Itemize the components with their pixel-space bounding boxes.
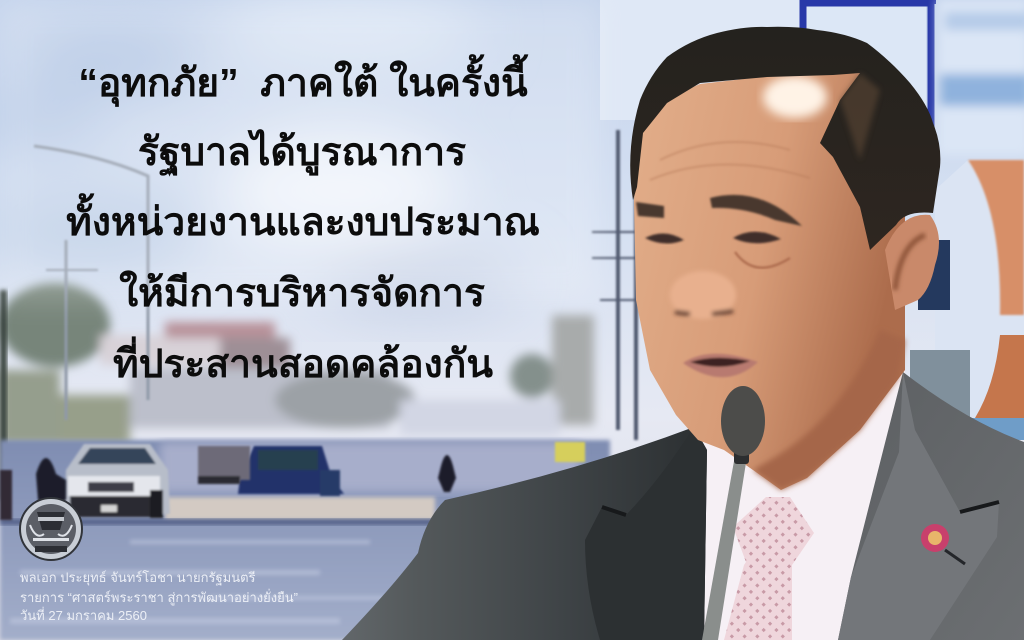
- portrait: face and neck: [634, 73, 905, 490]
- heading: quote text: รัฐบาลได้บูรณาการ: [138, 129, 466, 177]
- portrait: white shirt: [695, 370, 905, 640]
- portrait: jaw shadow: [753, 330, 905, 490]
- background: motorcyclist and pedestrian: [0, 442, 585, 520]
- background: orange building: [910, 160, 1024, 440]
- caption: speaker and programme credit: วันที่ 27 มกราคม 2560: [20, 607, 147, 623]
- portrait: forehead wrinkles: [650, 142, 810, 180]
- portrait: forehead highlight: [763, 76, 827, 118]
- background: distant grey car: [198, 446, 250, 484]
- heading: quote text: ทั้งหน่วยงานและงบประมาณ: [66, 193, 540, 244]
- background: sky patch right: [938, 0, 1024, 155]
- portrait: nose: [670, 271, 736, 319]
- caption: speaker and programme credit: [20, 570, 298, 623]
- veil: white haze over left: [0, 0, 600, 300]
- portrait: hair: [630, 27, 940, 250]
- portrait: suit right side: [838, 372, 1024, 640]
- portrait: ear: [885, 215, 939, 310]
- heading: quote text: ที่ประสานสอดคล้องกัน: [113, 336, 493, 386]
- caption: speaker and programme credit: รายการ “ศาสตร์พระราชา สู่การพัฒนาอย่างยั่งยืน”: [20, 589, 298, 606]
- background: dark left edge: [0, 290, 7, 500]
- portrait: speaker: [342, 27, 1024, 640]
- portrait: mouth: [683, 354, 758, 377]
- portrait: eyes: [645, 232, 781, 244]
- background: pickup truck: [64, 444, 170, 518]
- background: blue car: [238, 446, 344, 496]
- background: pale band behind head: [600, 0, 810, 120]
- portrait: lapel right: [838, 372, 999, 640]
- logo: government seal: [20, 498, 82, 560]
- background: flooded road: [0, 440, 610, 640]
- background: street lamps and poles: [34, 146, 148, 420]
- portrait: eyebrows: [636, 195, 802, 226]
- heading: quote text: “อุทกภัย” ภาคใต้ ในครั้งนี้: [78, 54, 529, 107]
- portrait: temple hair shading: [840, 73, 880, 160]
- caption: speaker and programme credit: พลเอก ประยุทธ์ จันทร์โอชา นายกรัฐมนตรี: [20, 570, 256, 586]
- heading: quote text: ให้มีการบริหารจัดการ: [119, 270, 485, 315]
- portrait: microphone: [702, 386, 765, 640]
- background: blue tower frame: [800, 0, 936, 130]
- portrait: dark lapel left: [585, 427, 707, 640]
- background: utility poles right: [592, 130, 640, 440]
- portrait: lapel notches: [602, 502, 999, 515]
- portrait: eye bags: [735, 252, 790, 268]
- background: distant trees and buildings: [0, 283, 594, 445]
- portrait: suit left side: [342, 427, 707, 640]
- heading: quote text: [66, 54, 540, 386]
- portrait: tie: [724, 497, 814, 640]
- portrait: lapel pin: [921, 524, 965, 564]
